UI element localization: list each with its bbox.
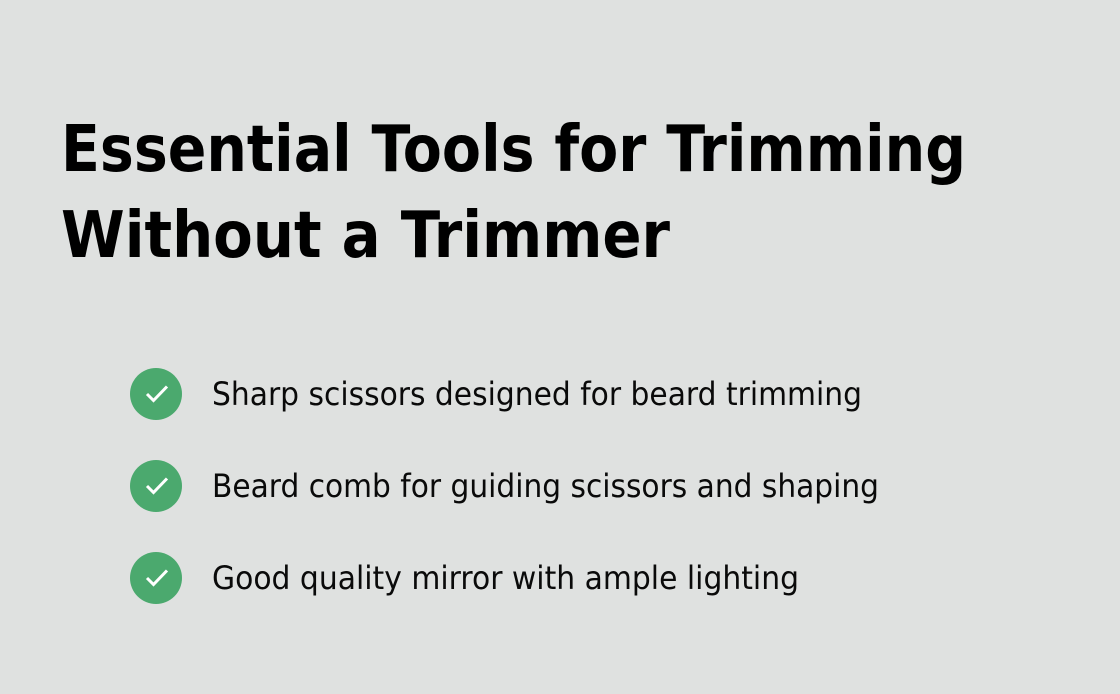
item: sharp scissors: Sharp scissors designed for beard trimming bbox=[212, 375, 862, 413]
item: beard comb: Beard comb for guiding scissors and shaping bbox=[212, 467, 879, 505]
title: Essential Tools for Trimming bbox=[61, 113, 966, 187]
title bbox=[61, 113, 966, 273]
checklist bbox=[130, 368, 879, 604]
title: Without a Trimmer bbox=[61, 199, 670, 273]
item: mirror bbox=[130, 552, 799, 604]
item: beard comb bbox=[130, 460, 879, 512]
item: sharp scissors bbox=[130, 368, 862, 420]
item: mirror: Good quality mirror with ample lighting bbox=[212, 559, 799, 597]
